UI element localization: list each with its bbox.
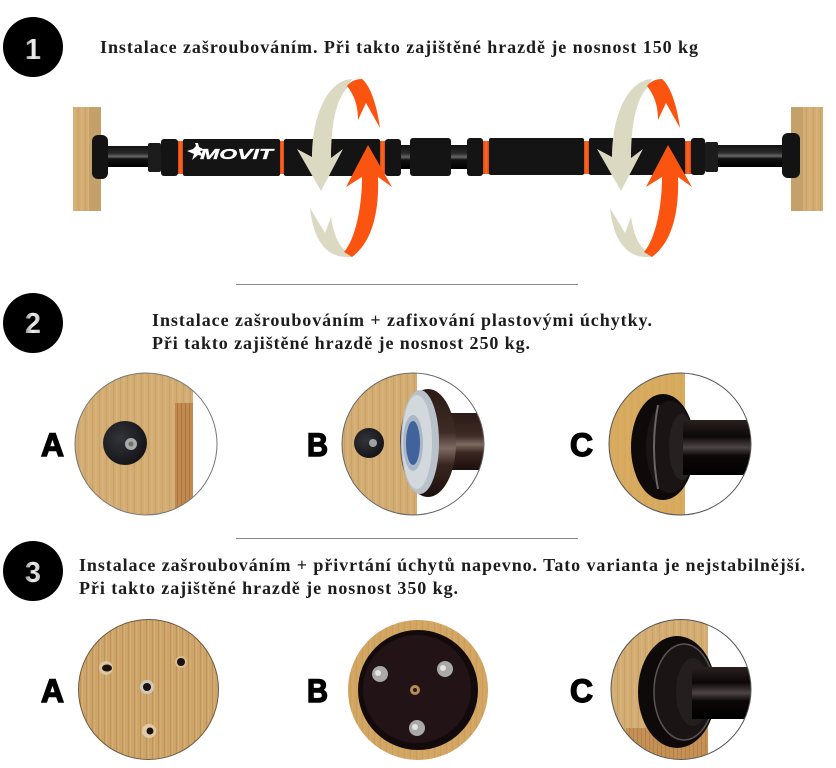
label C, step 3: C	[570, 673, 593, 709]
heading: step 2: Při takto zajištěné hrazdě je nosnost 250 kg.	[152, 333, 530, 353]
badge: step 1	[3, 17, 63, 77]
screw cap	[354, 428, 384, 458]
black tube	[683, 420, 753, 475]
badge: step 3: 3	[25, 557, 41, 589]
left wooden door frame	[73, 107, 101, 211]
label A, step 2: A	[41, 427, 64, 463]
heading: step 1: Instalace zašroubováním. Při takto zajištěné hrazdě je nosnost 150 kg	[100, 37, 698, 57]
brown flange	[400, 389, 456, 497]
brown neck	[450, 413, 486, 470]
photo: screw cap on frame	[75, 373, 193, 515]
label C, step 2: C	[570, 427, 593, 463]
heading: step 2	[152, 310, 652, 353]
heading: step 3: Při takto zajištěné hrazdě je nosnost 350 kg.	[79, 578, 458, 598]
heading: step 2: Instalace zašroubováním + zafixování plastovými úchytky.	[152, 310, 652, 330]
heading: step 3: Instalace zašroubováním + přivrtání úchytů napevno. Tato varianta je nejstabilnější.	[79, 555, 805, 575]
rotation arrows, left	[297, 79, 392, 257]
pull-up bar illustration	[73, 79, 823, 257]
badge: step 2	[3, 293, 63, 353]
screws	[372, 661, 453, 736]
photo: drilled holes	[78, 619, 220, 761]
orange rings	[177, 141, 692, 174]
black screw cap	[103, 421, 147, 465]
frame edge strip	[175, 403, 193, 515]
photo: cap interior with screws	[348, 620, 488, 760]
dark cap	[358, 630, 478, 750]
photo: bar end fixed to frame	[611, 619, 753, 762]
label B, step 3: B	[307, 673, 328, 709]
right wooden door frame	[791, 107, 823, 211]
Movit logo	[187, 143, 276, 163]
four drilled holes	[99, 656, 187, 738]
Movit logo: MOVIT	[200, 146, 276, 163]
heading: step 3	[79, 555, 805, 598]
photo: mounted bar end	[609, 373, 753, 515]
badge: step 1: 1	[25, 34, 41, 66]
black flange	[638, 636, 716, 748]
black foam grips	[161, 138, 705, 176]
rotation arrows, right	[597, 79, 692, 257]
clear suction disc	[401, 390, 439, 494]
black flange	[631, 394, 695, 500]
black tube	[692, 667, 753, 719]
metal rods and flanges	[92, 133, 800, 179]
label A, step 3: A	[41, 673, 64, 709]
label B, step 2: B	[307, 427, 328, 463]
badge: step 2: 2	[25, 308, 41, 340]
photo: suction cap flange	[342, 373, 486, 515]
badge: step 3	[3, 541, 63, 601]
